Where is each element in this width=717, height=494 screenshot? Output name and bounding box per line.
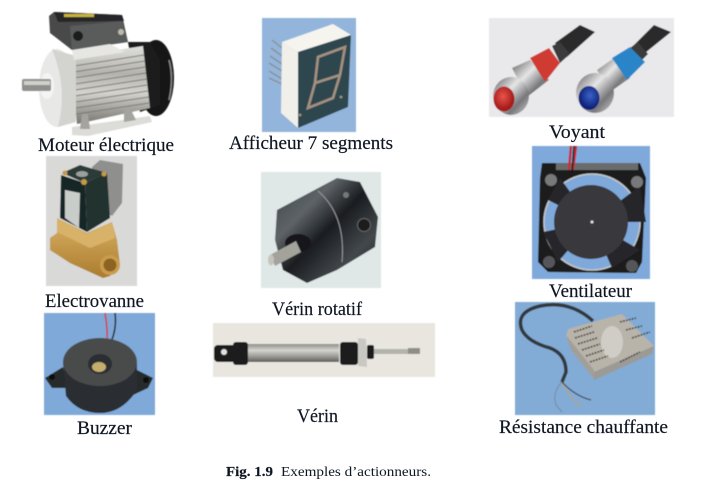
photo: buzzer bbox=[44, 313, 155, 415]
red indicator light bbox=[493, 25, 595, 115]
resistor cable bbox=[520, 305, 593, 382]
photo: heating resistor bbox=[515, 302, 655, 415]
label: Buzzer: Buzzer bbox=[77, 418, 133, 439]
blue indicator light bbox=[576, 25, 671, 113]
photo: cooling fan bbox=[532, 146, 650, 279]
valve coil bbox=[85, 173, 110, 232]
label: Vérin rotatif: Vérin rotatif bbox=[272, 299, 363, 320]
photo: pneumatic cylinder bbox=[213, 323, 435, 377]
photo: 7-segment display bbox=[262, 18, 356, 132]
buzzer body bbox=[63, 362, 137, 413]
buzzer wires bbox=[105, 313, 107, 344]
cylinder piston rod bbox=[368, 349, 418, 354]
motor front flange bbox=[39, 49, 75, 127]
valve brass block bbox=[50, 218, 120, 278]
label: Voyant: Voyant bbox=[549, 122, 606, 143]
resistor lead wires bbox=[555, 382, 562, 412]
figure caption bbox=[226, 465, 431, 480]
fan frame bbox=[538, 163, 646, 273]
figure caption: Exemples d’actionneurs. bbox=[281, 465, 431, 480]
fan wires bbox=[569, 146, 576, 170]
cylinder tube bbox=[247, 344, 339, 362]
motor feet bbox=[72, 116, 152, 136]
label: Ventilateur: Ventilateur bbox=[549, 281, 633, 302]
photo: solenoid valve bbox=[46, 156, 137, 286]
label: Electrovanne: Electrovanne bbox=[45, 291, 144, 312]
resistor plate bbox=[566, 314, 654, 376]
label: Afficheur 7 segments: Afficheur 7 segments bbox=[229, 133, 393, 154]
photo: electric motor bbox=[22, 12, 174, 136]
display housing bbox=[281, 42, 298, 128]
valve connector bbox=[92, 160, 123, 216]
figure caption: Fig. 1.9 bbox=[226, 465, 273, 480]
photo: rotary actuator bbox=[261, 172, 381, 288]
actuator shaft bbox=[285, 234, 311, 252]
seven segments bbox=[308, 47, 345, 108]
buzzer mounting ears bbox=[45, 367, 68, 388]
motor finned body bbox=[70, 46, 150, 124]
label: Moteur électrique: Moteur électrique bbox=[38, 135, 174, 156]
actuator drum bbox=[275, 178, 378, 283]
cylinder end caps bbox=[214, 345, 236, 362]
fan blades and hub bbox=[543, 178, 646, 268]
motor rear black cover bbox=[138, 40, 174, 116]
photo: indicator lights bbox=[489, 18, 674, 117]
motor terminal box bbox=[49, 12, 128, 50]
label: Vérin: Vérin bbox=[297, 406, 338, 427]
motor shaft bbox=[22, 79, 51, 91]
label: Résistance chauffante: Résistance chauffante bbox=[499, 417, 668, 438]
display pins bbox=[269, 40, 282, 84]
